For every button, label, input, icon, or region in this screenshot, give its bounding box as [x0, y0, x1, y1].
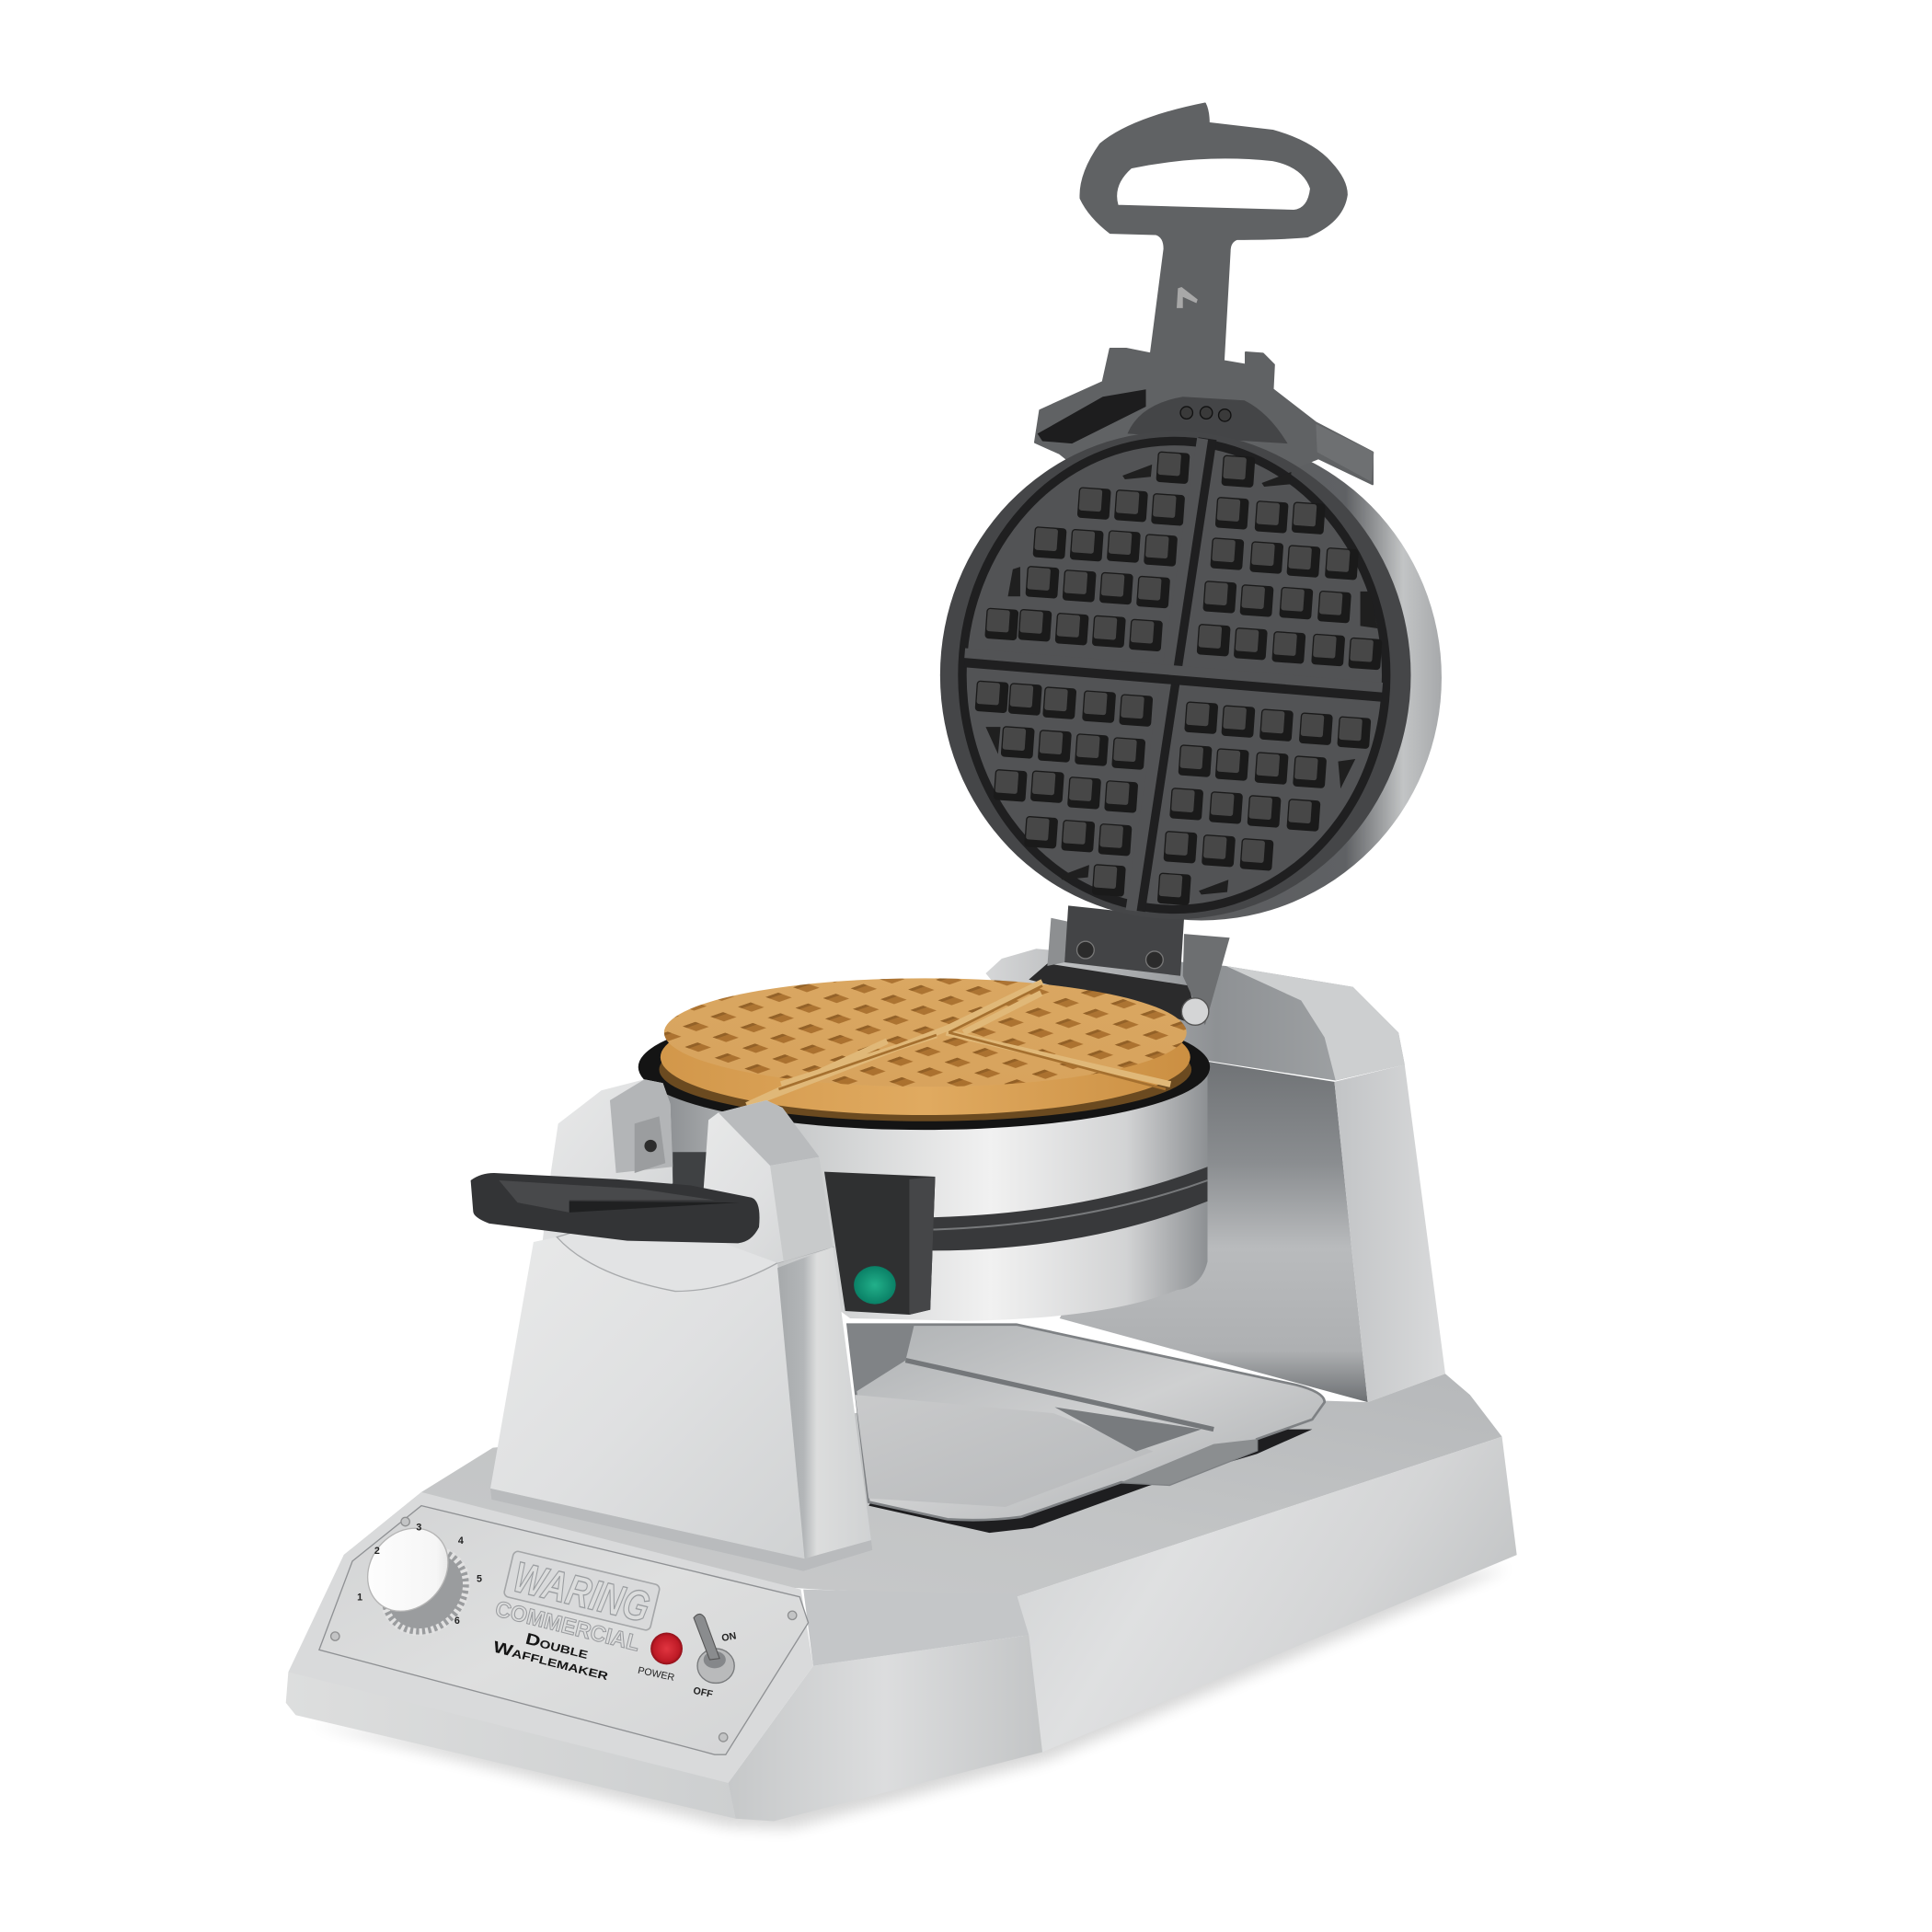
- temperature dial numbers: 4: [458, 1535, 464, 1547]
- back tower: [985, 949, 1445, 1402]
- lid handle top: [1035, 103, 1373, 493]
- tray body: [847, 1325, 1325, 1520]
- left tower: [490, 1079, 872, 1571]
- tray tab: [1121, 1439, 1257, 1485]
- back tower cap: [985, 949, 1405, 1081]
- front handle: [471, 1173, 760, 1243]
- waffle grid squares: [975, 451, 1382, 905]
- waffle top: [664, 978, 1187, 1087]
- commercial lettering: COMMERCIAL: [493, 1596, 642, 1657]
- vertical channel: [1136, 439, 1207, 911]
- black control box: [824, 1172, 936, 1315]
- handle slot: [499, 1180, 715, 1213]
- tray reflection: [1054, 1407, 1202, 1452]
- temperature dial numbers: 6: [454, 1616, 460, 1627]
- right post: [704, 1100, 833, 1263]
- tower notch plate: [557, 1213, 833, 1292]
- toggle switch: [692, 1614, 738, 1700]
- plate outer ring: [940, 431, 1410, 919]
- tower front face: [490, 1237, 805, 1558]
- right post cap: [719, 1100, 820, 1166]
- product name: Double: [523, 1629, 591, 1662]
- batter shadow: [660, 1018, 1191, 1121]
- temperature dial numbers: 3: [416, 1522, 421, 1533]
- base corner face: [729, 1635, 1042, 1821]
- horizontal channel: [965, 658, 1383, 693]
- temperature knob: [351, 1512, 487, 1652]
- tower side strip: [777, 1247, 871, 1558]
- temperature dial numbers: 1: [357, 1593, 362, 1604]
- plate screws: [331, 1517, 797, 1742]
- base front bevel: [286, 1648, 736, 1819]
- hinge end cap: [1181, 998, 1209, 1025]
- base long right face: [1017, 1437, 1517, 1752]
- temperature dial numbers: 2: [374, 1546, 380, 1557]
- cap bevel: [1226, 966, 1405, 1081]
- brand logo: WARING: [509, 1553, 654, 1631]
- base: [286, 1374, 1517, 1821]
- power light: POWER: [637, 1665, 675, 1684]
- product name: Wafflemaker: [491, 1638, 611, 1684]
- waffle: [660, 978, 1191, 1121]
- power light: [637, 1633, 683, 1684]
- quarter cuts: [747, 982, 1170, 1105]
- base corner upper band: [803, 1590, 1029, 1666]
- product name: [491, 1629, 611, 1684]
- bowl housing: [665, 1075, 1207, 1321]
- tower bottom lip: [490, 1489, 872, 1571]
- handle rivet: [1177, 287, 1198, 308]
- back tower body: [1060, 1060, 1368, 1402]
- bowl rim: [638, 1005, 1210, 1130]
- front control plate: [319, 1506, 809, 1754]
- yoke black crescent: [1038, 389, 1146, 443]
- top screws: [1180, 407, 1231, 421]
- dark seam ring: [930, 1167, 1207, 1250]
- waffle side: [661, 999, 1190, 1115]
- hinge arms: [1047, 918, 1068, 966]
- left post: [542, 1079, 673, 1245]
- tray floor: [855, 1395, 1154, 1507]
- temperature dial numbers: [357, 1522, 482, 1627]
- hinge plate: [1064, 905, 1184, 976]
- illustration: double waffle maker: [285, 103, 1517, 1834]
- back tower side: [1334, 1064, 1445, 1402]
- base shadow: [308, 1568, 1510, 1829]
- lid hinge: [1029, 905, 1230, 1025]
- hinge bracket: [635, 1116, 665, 1173]
- tray shadow: [868, 1430, 1312, 1533]
- recess behind posts: [673, 1152, 720, 1198]
- drip tray: [847, 1325, 1325, 1533]
- front face surround: [288, 1492, 813, 1783]
- yoke right block: [1316, 424, 1374, 482]
- hinge pins: [1029, 963, 1198, 1025]
- base top surface: [344, 1374, 1502, 1597]
- lid plate with grid: [940, 397, 1410, 919]
- temperature dial numbers: 5: [477, 1574, 482, 1585]
- toggle switch: ON: [720, 1630, 738, 1644]
- green indicator light: [854, 1266, 896, 1305]
- plate top tab: [1127, 397, 1288, 443]
- upper lid silver shell: [961, 435, 1442, 920]
- toggle switch: OFF: [692, 1685, 714, 1700]
